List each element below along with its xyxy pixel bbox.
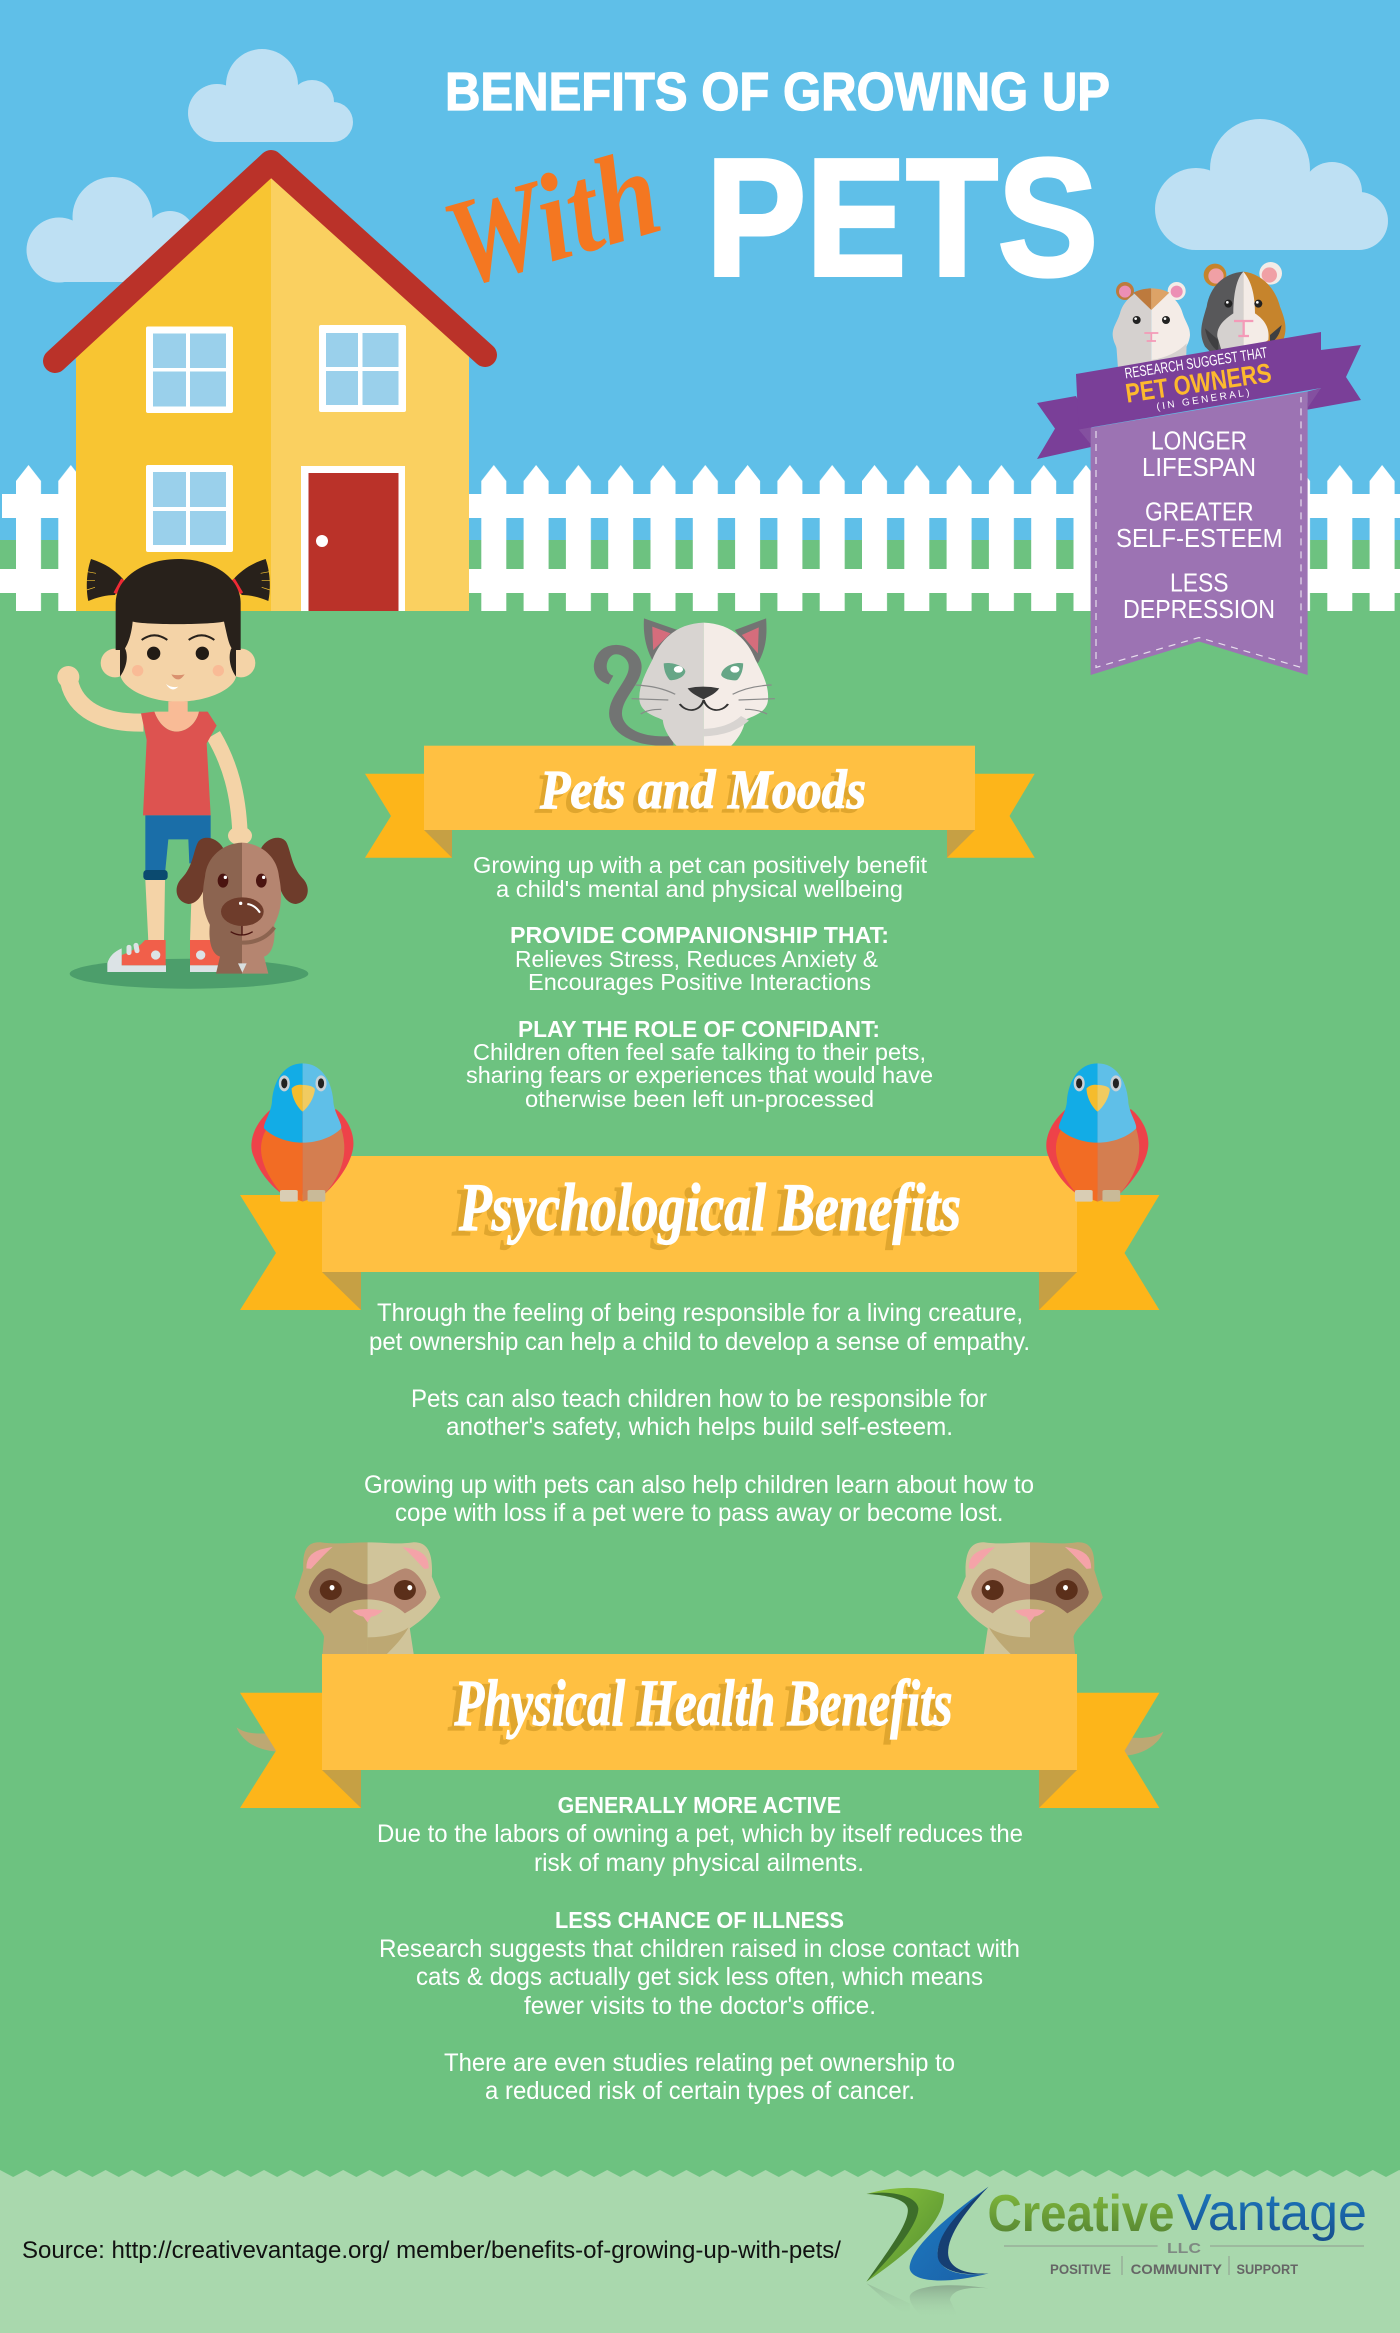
title: benefits of growing up: BENEFITS OF GROWING UP <box>445 62 1110 122</box>
wordmark: Creative: Creative <box>988 2185 1174 2243</box>
ribbon folds <box>322 1770 1077 1808</box>
tagline: community: COMMUNITY <box>1131 2262 1222 2277</box>
heading: Pets and Moods <box>539 759 866 820</box>
text block: pets and moods: Encourages Positive Interactions <box>528 969 871 995</box>
text block: pets and moods: sharing fears or experiences that would have <box>466 1062 933 1088</box>
source text: Source: http://creativevantage.org/ member/benefits-of-growing-up-with-pets/ <box>22 2237 841 2264</box>
icon: parrot right <box>1046 1063 1148 1202</box>
ribbon tails <box>1037 345 1361 459</box>
text block: psychological benefits: Through the feeling of being responsible for a living creature, <box>377 1299 1023 1327</box>
text block: psychological benefits: Growing up with pets can also help children learn about how to <box>364 1471 1034 1499</box>
text block: pets and moods: a child's mental and physical wellbeing <box>496 876 903 902</box>
benefit: less depression: DEPRESSION <box>1123 594 1275 624</box>
text block: pets and moods: Relieves Stress, Reduces Anxiety & <box>515 946 878 972</box>
heading shadow: Physical Health Benefits <box>447 1672 946 1745</box>
title: PETS: PETS <box>706 125 1098 311</box>
wordmark: Vantage: Vantage <box>1177 2184 1367 2242</box>
benefit: less depression: LESS <box>1170 568 1229 598</box>
text block: psychological benefits: Pets can also teach children how to be responsible for <box>411 1385 987 1413</box>
ribbon front <box>322 1156 1077 1272</box>
heading shadow: Pets and Moods <box>534 763 861 824</box>
cloud: top centre <box>188 49 353 142</box>
dog <box>177 838 308 974</box>
text block: physical health benefits: Due to the labors of owning a pet, which by itself reduces the <box>377 1820 1023 1848</box>
tagline: support: SUPPORT <box>1236 2262 1299 2277</box>
text block: pets and moods: Children often feel safe talking to their pets, <box>473 1039 926 1065</box>
benefit: greater self-esteem <box>1116 496 1283 553</box>
heading shadow: Psychological Benefits <box>451 1174 954 1250</box>
text block: physical health benefits: risk of many physical ailments. <box>534 1849 864 1877</box>
dashed stitching <box>1096 397 1301 667</box>
house <box>55 162 485 611</box>
ribbon folds <box>424 830 975 858</box>
panel: pet owners ribbon <box>1037 332 1361 675</box>
text block: physical health benefits: fewer visits to the doctor's office. <box>524 1992 876 2020</box>
ribbon text: in general: (IN GENERAL) <box>1156 387 1250 413</box>
tagline: positive: POSITIVE <box>1050 2262 1111 2277</box>
ribbon folds <box>322 1272 1077 1310</box>
text block: pets and moods: PROVIDE COMPANIONSHIP THAT: <box>510 922 889 948</box>
banner: physical health benefits <box>240 1654 1159 1808</box>
cloud: behind house <box>26 177 195 282</box>
icon: cat <box>600 618 775 747</box>
text block: psychological benefits: cope with loss if a pet were to pass away or become lost. <box>395 1499 1004 1527</box>
banner: psychological benefits <box>240 1156 1159 1310</box>
text block: pets and moods: otherwise been left un-processed <box>525 1086 874 1112</box>
banner: pets and moods <box>365 746 1035 858</box>
text block: psychological benefits: pet ownership can help a child to develop a sense of empathy. <box>369 1328 1030 1356</box>
text block: psychological benefits <box>364 1299 1034 1527</box>
window: lower left <box>146 465 233 552</box>
ribbon fold <box>1079 388 1321 444</box>
text block: physical health benefits: cats & dogs actually get sick less often, which means <box>416 1963 983 1991</box>
text block: pets and moods: PLAY THE ROLE OF CONFIDANT: <box>518 1016 880 1042</box>
text block: pets and moods: Growing up with a pet can positively benefit <box>473 852 928 878</box>
icon: hamster <box>1113 282 1190 373</box>
benefit: greater self-esteem: GREATER <box>1145 496 1254 526</box>
ribbon tails <box>240 1195 1159 1310</box>
title: With: With <box>430 123 674 315</box>
ribbon tails <box>240 1693 1159 1808</box>
text block: physical health benefits: GENERALLY MORE ACTIVE <box>558 1792 841 1818</box>
icon: parrot left <box>251 1063 353 1202</box>
benefit: greater self-esteem: SELF-ESTEEM <box>1116 523 1283 553</box>
window: upper right <box>319 325 406 412</box>
benefit: longer lifespan: LIFESPAN <box>1142 452 1256 482</box>
text block: physical health benefits: Research suggests that children raised in close contact with <box>379 1935 1020 1963</box>
roof <box>55 162 485 361</box>
heading: Psychological Benefits <box>458 1169 961 1245</box>
logo mark <box>866 2187 989 2318</box>
icon: ferret right <box>957 1542 1163 1756</box>
logo rules <box>1004 2246 1364 2275</box>
cloud: right <box>1155 119 1388 250</box>
text block: physical health benefits: a reduced risk of certain types of cancer. <box>485 2077 915 2105</box>
benefit: longer lifespan <box>1142 426 1256 482</box>
ribbon text: pet owners: PET OWNERS <box>1124 358 1273 409</box>
ribbon tails <box>365 774 1035 858</box>
icon: guinea pig <box>1201 262 1286 357</box>
text block: physical health benefits: LESS CHANCE OF ILLNESS <box>555 1907 844 1933</box>
ribbon front band <box>1076 332 1321 430</box>
icon: ferret left <box>237 1542 440 1752</box>
lawn <box>0 540 1400 2180</box>
door <box>301 466 405 611</box>
benefit: less depression <box>1123 568 1275 624</box>
ribbon front <box>322 1654 1077 1770</box>
banner body <box>1091 392 1308 675</box>
heading: Physical Health Benefits <box>454 1667 952 1740</box>
text block: psychological benefits: another's safety, which helps build self-esteem. <box>446 1413 953 1441</box>
text block: pets and moods <box>466 852 933 1112</box>
footer band <box>0 2170 1400 2333</box>
picket fence <box>0 465 1400 611</box>
house walls <box>76 177 469 611</box>
logo: creative vantage <box>866 2184 1367 2318</box>
wordmark: LLC: LLC <box>1167 2240 1201 2257</box>
text block: physical health benefits <box>377 1792 1023 2105</box>
benefit: longer lifespan: LONGER <box>1151 426 1247 456</box>
ground shadow <box>70 959 308 989</box>
ribbon text: research suggest that: RESEARCH SUGGEST THAT <box>1124 344 1269 382</box>
girl <box>57 559 271 972</box>
illustration: girl with dog <box>57 559 308 989</box>
window: upper left <box>146 326 233 413</box>
text block: physical health benefits: There are even studies relating pet ownership to <box>444 2049 955 2077</box>
ribbon front <box>424 746 975 830</box>
sky background <box>0 0 1400 545</box>
